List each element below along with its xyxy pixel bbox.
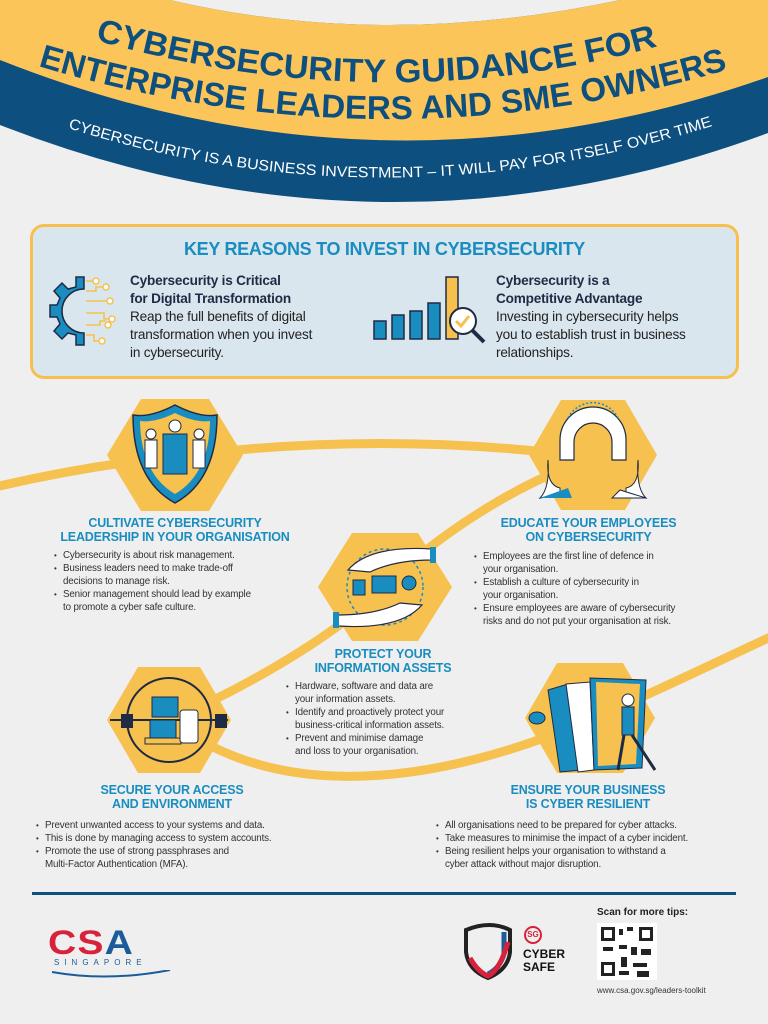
section: secure access: SECURE YOUR ACCESS xyxy=(101,783,243,797)
logo: SG Cyber Safe: SG xyxy=(527,930,539,939)
section: educate employees: your organisation. xyxy=(483,564,558,575)
section: protect information assets: your information assets. xyxy=(295,694,395,705)
section: cultivate leadership: LEADERSHIP IN YOUR ORGANISATION xyxy=(60,530,290,544)
logo: SG Cyber Safe xyxy=(464,923,565,980)
section: cyber resilient: ENSURE YOUR BUSINESS xyxy=(511,783,665,797)
icon: resilient hexagon xyxy=(525,663,655,773)
section: secure access: Promote the use of strong passphrases and xyxy=(45,846,229,857)
section: cultivate leadership: Business leaders need to make trade-off xyxy=(63,563,233,574)
icon: educate hexagon xyxy=(529,400,657,510)
section: cultivate leadership xyxy=(54,516,290,613)
section: cyber resilient: Take measures to minimise the impact of a cyber incident. xyxy=(445,833,688,844)
section: educate employees: Employees are the first line of defence in xyxy=(483,551,654,562)
icon: gear circuit xyxy=(49,276,116,346)
QR code block: Scan for more tips: xyxy=(597,907,688,918)
logo: CSA Singapore xyxy=(48,924,170,978)
heading: key reasons: KEY REASONS TO INVEST IN CYBERSECURITY xyxy=(184,239,585,259)
section: secure access: Multi-Factor Authentication (MFA). xyxy=(45,859,188,870)
text block: competitive advantage: Cybersecurity is a xyxy=(496,273,610,288)
section: educate employees xyxy=(474,516,676,627)
section: protect information assets: business-critical information assets. xyxy=(295,720,444,731)
text block: digital transformation: Cybersecurity is Critical xyxy=(130,273,281,288)
section: protect information assets: Prevent and minimise damage xyxy=(295,733,423,744)
icon: leadership hexagon xyxy=(107,399,243,511)
section: protect information assets: INFORMATION ASSETS xyxy=(315,661,451,675)
text block: competitive advantage: you to establish trust in business xyxy=(496,327,686,342)
title: ENTERPRISE LEADERS AND SME OWNERS xyxy=(40,44,726,120)
title: CYBERSECURITY GUIDANCE FOR xyxy=(98,20,658,82)
road and hexagons xyxy=(0,399,768,781)
text block: digital transformation xyxy=(130,273,312,360)
section: protect information assets: Identify and proactively protect your xyxy=(295,707,444,718)
section: educate employees: your organisation. xyxy=(483,590,558,601)
section: protect information assets: Hardware, software and data are xyxy=(295,681,433,692)
section: educate employees: risks and do not put your organisation at risk. xyxy=(483,616,671,627)
header banner xyxy=(0,0,768,202)
icon: secure hexagon xyxy=(107,667,231,773)
section: cultivate leadership: CULTIVATE CYBERSECURITY xyxy=(88,516,262,530)
section: educate employees: EDUCATE YOUR EMPLOYEES xyxy=(501,516,676,530)
section: secure access: This is done by managing access to system accounts. xyxy=(45,833,272,844)
section: secure access: AND ENVIRONMENT xyxy=(112,797,232,811)
section: cyber resilient: All organisations need to be prepared for cyber attacks. xyxy=(445,820,677,831)
section: secure access: Prevent unwanted access to your systems and data. xyxy=(45,820,265,831)
icon: bar chart magnifier xyxy=(373,276,486,344)
section: cyber resilient xyxy=(436,783,688,870)
text block: competitive advantage: relationships. xyxy=(496,345,573,360)
section: protect information assets xyxy=(286,647,452,757)
QR code block: www.csa.gov.sg/leaders-toolkit xyxy=(597,986,706,995)
icon: protect hexagon xyxy=(318,533,452,641)
subtitle: CYBERSECURITY IS A BUSINESS INVESTMENT – IT WILL PAY FOR ITSELF OVER TIME xyxy=(70,116,712,178)
logo: CSA Singapore: CSA xyxy=(48,924,134,962)
logo: SG Cyber Safe: CYBER xyxy=(523,947,565,961)
text block: digital transformation: for Digital Transformation xyxy=(130,291,291,306)
section: educate employees: ON CYBERSECURITY xyxy=(526,530,651,544)
text block: competitive advantage xyxy=(496,273,686,360)
section: protect information assets: PROTECT YOUR xyxy=(335,647,431,661)
section: educate employees: Ensure employees are aware of cybersecurity xyxy=(483,603,675,614)
logo: CSA Singapore: SINGAPORE xyxy=(54,958,147,967)
QR code block xyxy=(597,907,706,995)
logo: SG Cyber Safe: SAFE xyxy=(523,960,555,974)
section: cultivate leadership: decisions to manage risk. xyxy=(63,576,170,587)
section: cyber resilient: cyber attack without major disruption. xyxy=(445,859,601,870)
text block: competitive advantage: Competitive Advantage xyxy=(496,291,642,306)
panel: key reasons xyxy=(30,224,739,379)
section: protect information assets: and loss to your organisation. xyxy=(295,746,418,757)
text block: digital transformation: transformation when you invest xyxy=(130,327,312,342)
section: cultivate leadership: Cybersecurity is about risk management. xyxy=(63,550,235,561)
section: cyber resilient: IS CYBER RESILIENT xyxy=(526,797,650,811)
section: cultivate leadership: to promote a cyber safe culture. xyxy=(63,602,196,613)
section: cyber resilient: Being resilient helps your organisation to withstand a xyxy=(445,846,666,857)
text block: competitive advantage: Investing in cybersecurity helps xyxy=(496,309,678,324)
section: educate employees: Establish a culture of cybersecurity in xyxy=(483,577,639,588)
section: secure access xyxy=(36,783,272,870)
text block: digital transformation: in cybersecurity. xyxy=(130,345,224,360)
text block: digital transformation: Reap the full benefits of digital xyxy=(130,309,306,324)
section: cultivate leadership: Senior management should lead by example xyxy=(63,589,251,600)
